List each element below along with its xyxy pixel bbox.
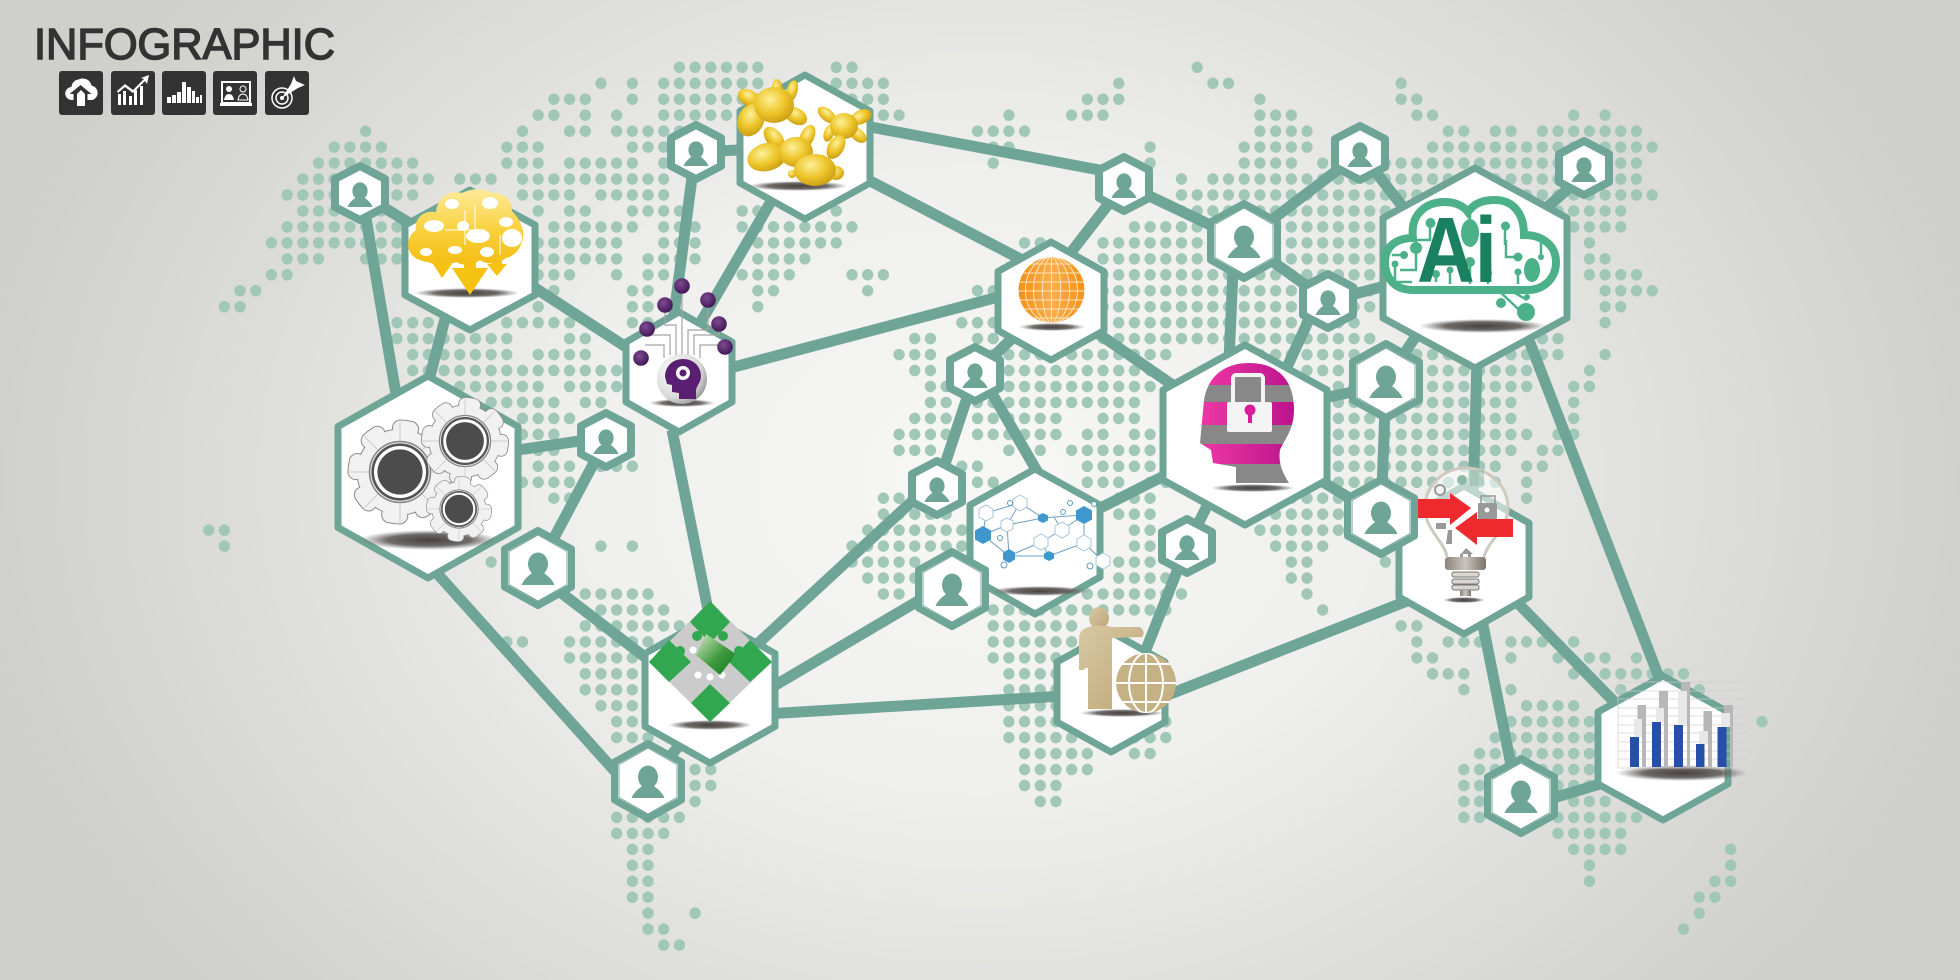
person node 3 xyxy=(581,413,631,467)
shadow xyxy=(1019,323,1085,331)
icon: silver sphere with head xyxy=(657,354,707,404)
arrow: left xyxy=(1455,512,1513,545)
icon: growth chart xyxy=(111,71,155,115)
person node 1 xyxy=(335,166,385,220)
icon: striped head xyxy=(1200,363,1294,483)
panel: AI cloud hexagon xyxy=(1383,168,1567,368)
person node 17 xyxy=(1488,758,1554,834)
person node 5 xyxy=(614,744,682,818)
shadow xyxy=(1616,765,1748,781)
icon: balloon dogs xyxy=(732,79,874,186)
icon: tan globe xyxy=(1116,653,1176,713)
panel: head with padlock hexagon xyxy=(1163,345,1327,525)
chart: 3D bars xyxy=(1618,682,1746,768)
icon: circuit lines xyxy=(645,290,722,358)
shadow xyxy=(359,530,499,550)
person node 6 xyxy=(1099,157,1149,211)
arrow: right xyxy=(1415,493,1471,525)
panel: network hexagon xyxy=(970,469,1110,614)
label: Ai: Ai xyxy=(1417,198,1497,302)
title: INFOGRAPHIC: INFOGRAPHIC xyxy=(34,20,335,69)
person node 11 xyxy=(1352,344,1420,418)
icon: cloud upload xyxy=(59,71,103,115)
icon row xyxy=(59,71,309,115)
icon: padlock xyxy=(1227,375,1272,432)
person node 10 xyxy=(1559,141,1609,195)
panel: bar chart hexagon xyxy=(1598,676,1748,820)
network connection lines xyxy=(360,125,1660,805)
panel: gold balloon dogs hexagon xyxy=(732,75,874,219)
panel: light bulb hexagon xyxy=(1399,468,1529,634)
panel: person with globe hexagon xyxy=(1057,607,1176,752)
panel: purple head circuit hexagon xyxy=(626,278,733,432)
person node 14 xyxy=(912,461,962,515)
shadow xyxy=(1419,319,1547,333)
person node 7 xyxy=(1210,204,1278,278)
shadow xyxy=(668,720,752,730)
icon: yellow cloud with arrows xyxy=(408,189,523,295)
icon: bar chart xyxy=(162,71,206,115)
person node 12 xyxy=(1348,480,1414,554)
person node 8 xyxy=(1335,126,1385,180)
person node 16 xyxy=(1162,519,1212,573)
panel: orange globe hexagon xyxy=(998,242,1104,360)
icon: target with arrow xyxy=(265,71,309,115)
person node 4 xyxy=(504,530,572,606)
shadow xyxy=(649,399,715,407)
panel: puzzle hexagon xyxy=(645,601,775,763)
shadow xyxy=(414,288,520,298)
icon: gears xyxy=(350,399,507,541)
dotted world map xyxy=(209,67,1762,945)
person node 2 xyxy=(671,125,721,179)
shadow xyxy=(1080,709,1164,717)
panel: gears hexagon xyxy=(338,376,518,578)
panel: cloud computing hexagon xyxy=(405,189,535,330)
shadow xyxy=(1211,484,1295,492)
person node 15 xyxy=(918,552,986,626)
shadow xyxy=(748,181,848,191)
icon: laptop conference xyxy=(213,71,257,115)
icon: light bulb xyxy=(1415,468,1513,596)
shadow xyxy=(990,586,1090,596)
icon: purple dots xyxy=(633,278,733,366)
icon: person figure xyxy=(1079,607,1144,709)
person node 13 xyxy=(950,347,1000,401)
icon: molecular network xyxy=(975,495,1110,569)
shadow xyxy=(1443,597,1485,603)
person node 9 xyxy=(1303,274,1353,328)
icon: AI circuit cloud xyxy=(1385,198,1556,321)
icon: puzzle diamond xyxy=(649,601,772,722)
icon: orange globe xyxy=(1018,257,1085,323)
